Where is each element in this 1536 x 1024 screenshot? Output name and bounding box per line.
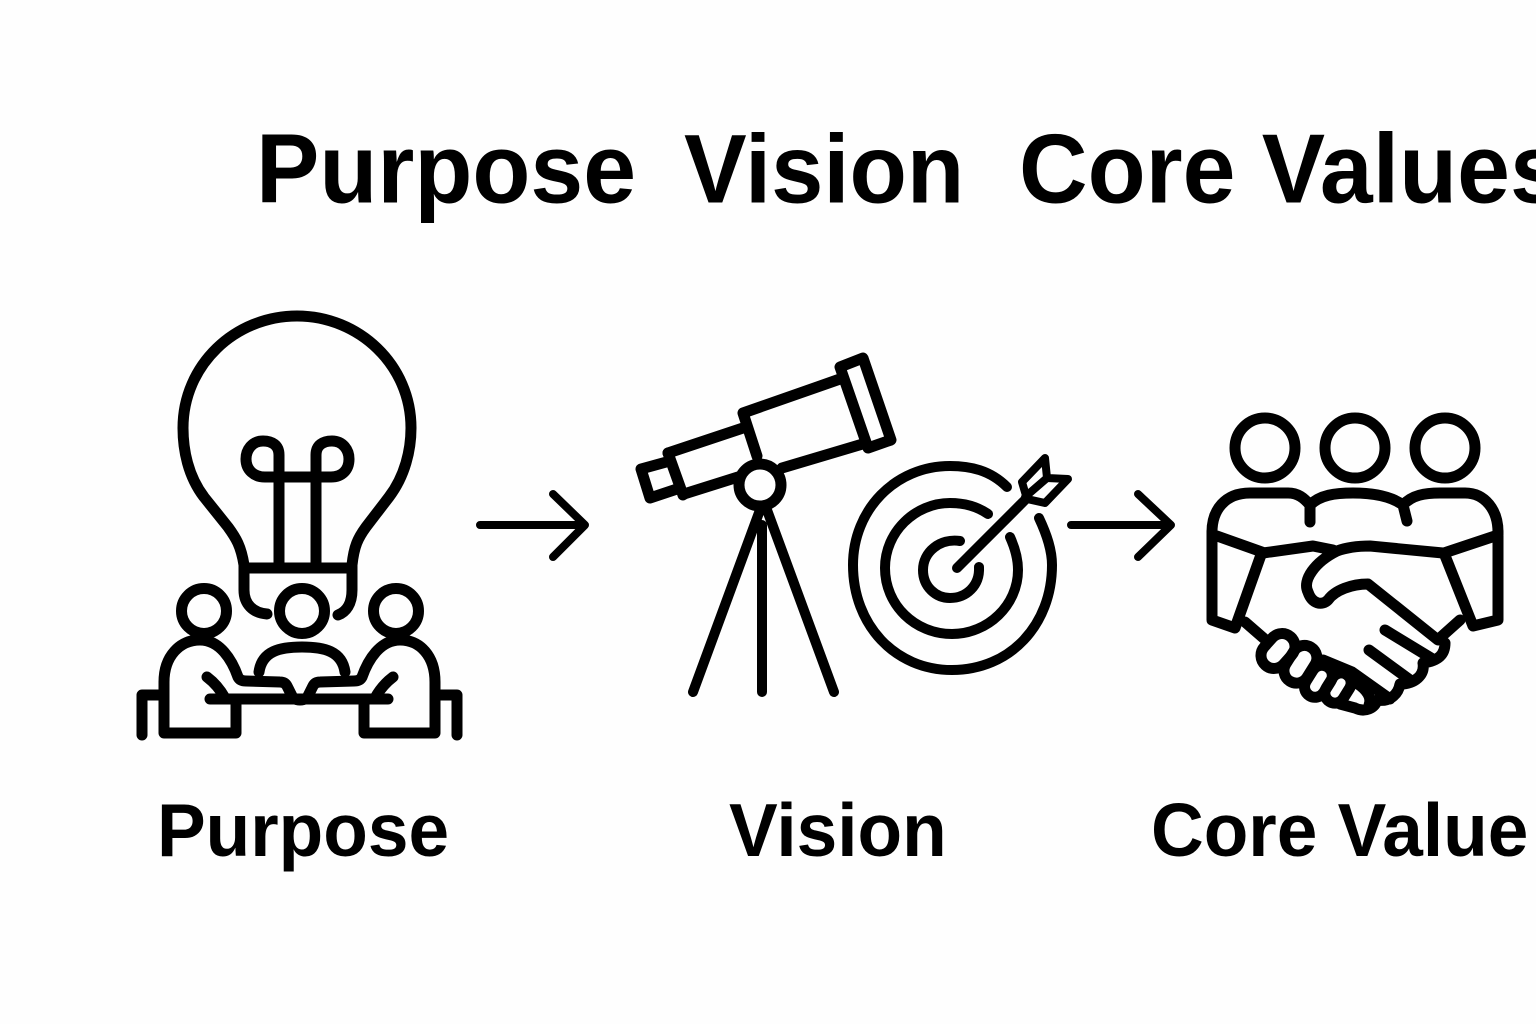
clasped hands [1263, 546, 1443, 640]
telescope mount [739, 464, 781, 506]
fingers [1256, 628, 1370, 707]
icon: light bulb over team meeting [142, 316, 457, 735]
left sleeve [1212, 532, 1262, 628]
right sleeve [1444, 532, 1498, 626]
right person [307, 588, 435, 733]
icon: telescope [641, 358, 891, 692]
label: core value: Core Value [1151, 788, 1528, 872]
table and chairs [142, 695, 457, 735]
label: purpose: Purpose [157, 788, 449, 872]
left person [164, 588, 293, 733]
arrow: purpose to vision [480, 494, 585, 557]
icon: target with arrow [853, 458, 1068, 670]
title: Purpose [256, 113, 636, 224]
arrow: vision to core values [1071, 494, 1171, 557]
target rings [853, 466, 1052, 670]
filament [246, 441, 349, 565]
title [256, 113, 1536, 224]
middle person [259, 588, 345, 700]
shoulders [1212, 493, 1498, 532]
label: vision: Vision [729, 788, 947, 872]
bulb outline [183, 316, 411, 615]
telescope tube [641, 379, 866, 498]
tripod [693, 510, 834, 692]
heads [1235, 418, 1475, 478]
icon: team handshake [1212, 418, 1498, 710]
title: Vision [684, 115, 964, 224]
arrow into target [957, 500, 1025, 568]
